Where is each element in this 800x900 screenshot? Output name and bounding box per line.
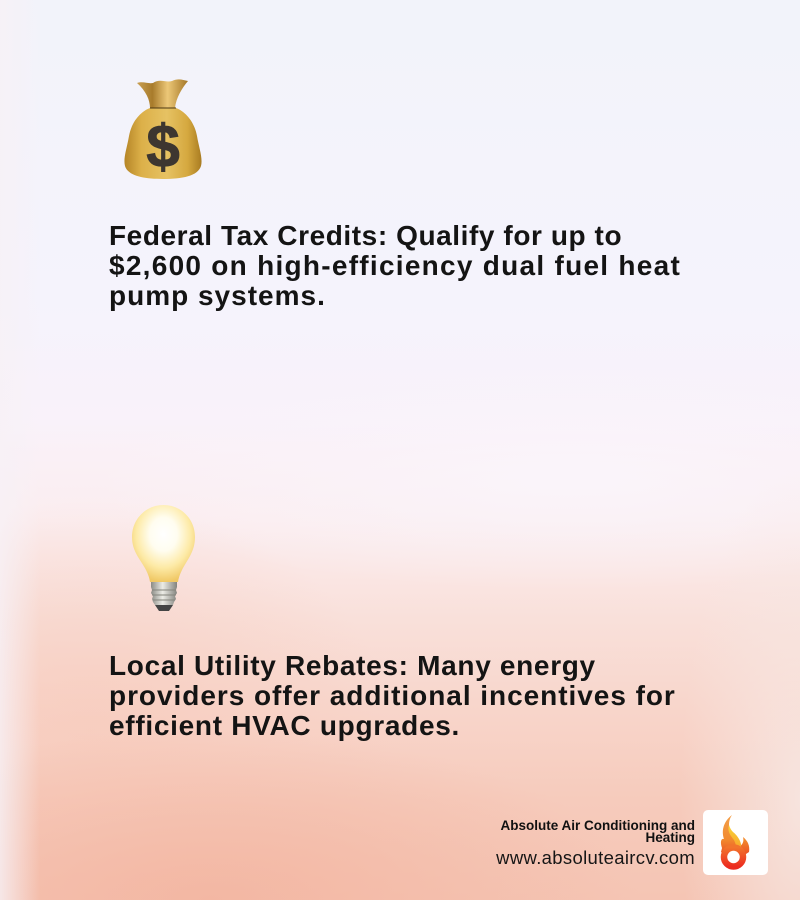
icon: money bag: $: [146, 113, 180, 180]
heading: local utility rebates: providers offer additional incentives for: [109, 680, 676, 711]
brand: company name and website: [496, 818, 695, 868]
heading: federal tax credits: [109, 220, 681, 311]
logo: flame on white tile: [703, 810, 768, 875]
icon: light bulb: [132, 505, 195, 611]
icon: money bag: [124, 79, 202, 180]
heading: local utility rebates: [109, 650, 676, 741]
company name: Heating: [645, 830, 695, 845]
company name: [500, 818, 695, 845]
website: www.absoluteaircv.com: [496, 847, 695, 868]
heading: federal tax credits: $2,600 on high-efficiency dual fuel heat: [109, 250, 681, 281]
heading: federal tax credits: pump systems.: [109, 280, 326, 311]
heading: federal tax credits: Federal Tax Credits: Qualify for up to: [109, 220, 622, 251]
company name: Absolute Air Conditioning and: [501, 818, 695, 833]
heading: local utility rebates: Local Utility Rebates: Many energy: [109, 650, 596, 681]
heading: local utility rebates: efficient HVAC upgrades.: [109, 710, 460, 741]
